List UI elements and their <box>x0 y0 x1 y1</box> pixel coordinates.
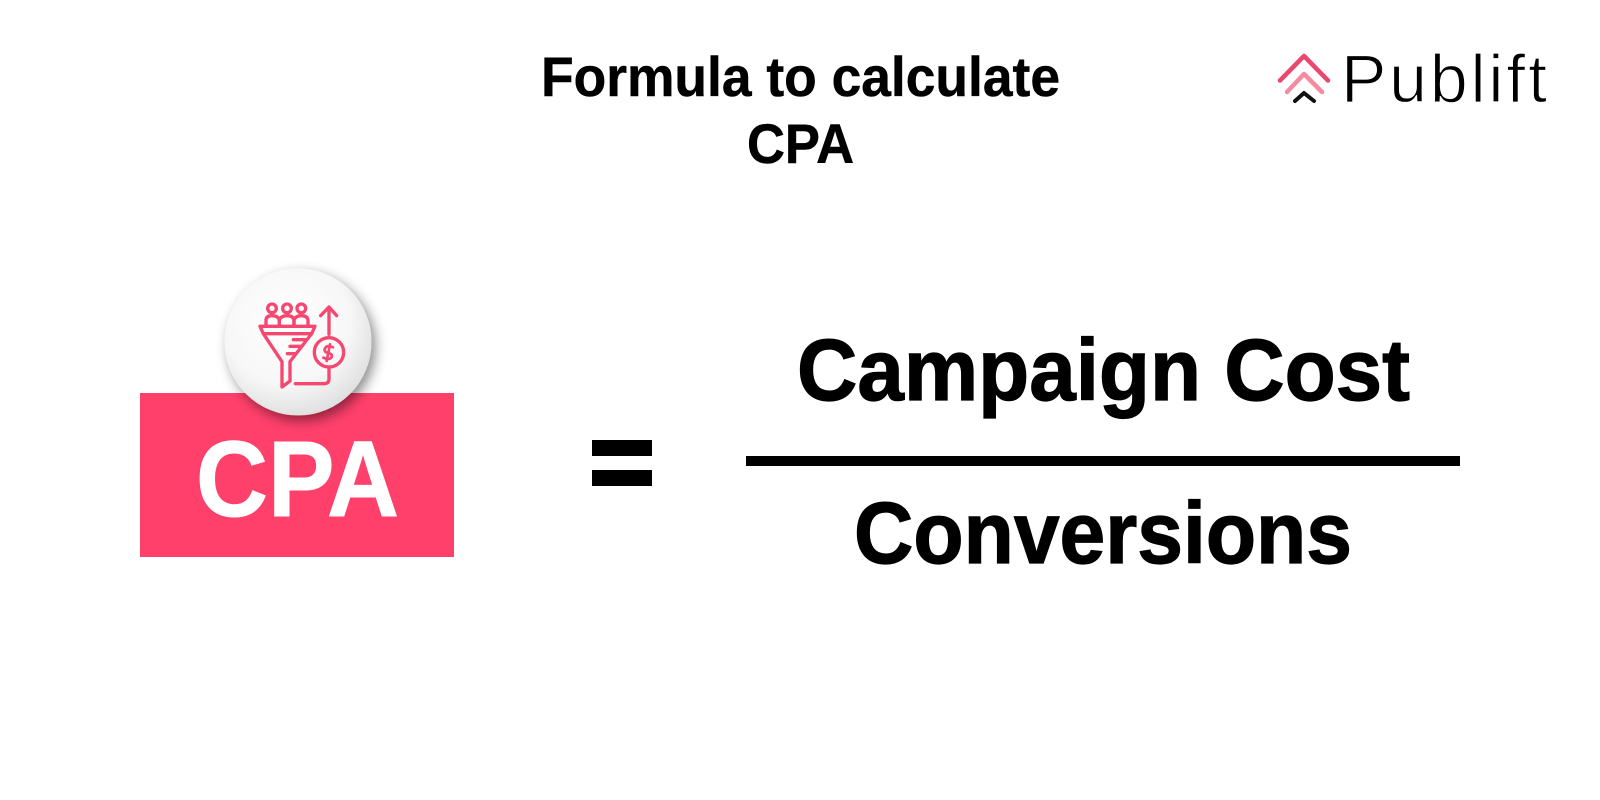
numerator: Campaign Cost <box>797 322 1410 419</box>
icon: funnel with people and dollar <box>260 304 344 387</box>
CPA text: CPA <box>196 418 399 539</box>
badge circle <box>224 268 372 416</box>
formula <box>746 322 1460 582</box>
equals sign <box>592 440 652 486</box>
title <box>541 45 1060 175</box>
fraction bar <box>746 456 1460 466</box>
CPA box <box>140 393 454 557</box>
icon: logo chevrons <box>1280 56 1328 101</box>
denominator: Conversions <box>854 485 1352 582</box>
icon: funnel badge <box>224 268 372 416</box>
logo wordmark: Publift <box>1341 41 1547 117</box>
panel: CPA label <box>140 393 454 557</box>
title: CPA <box>747 112 854 175</box>
logo: Publift <box>1280 41 1547 117</box>
title: Formula to calculate <box>541 45 1060 108</box>
